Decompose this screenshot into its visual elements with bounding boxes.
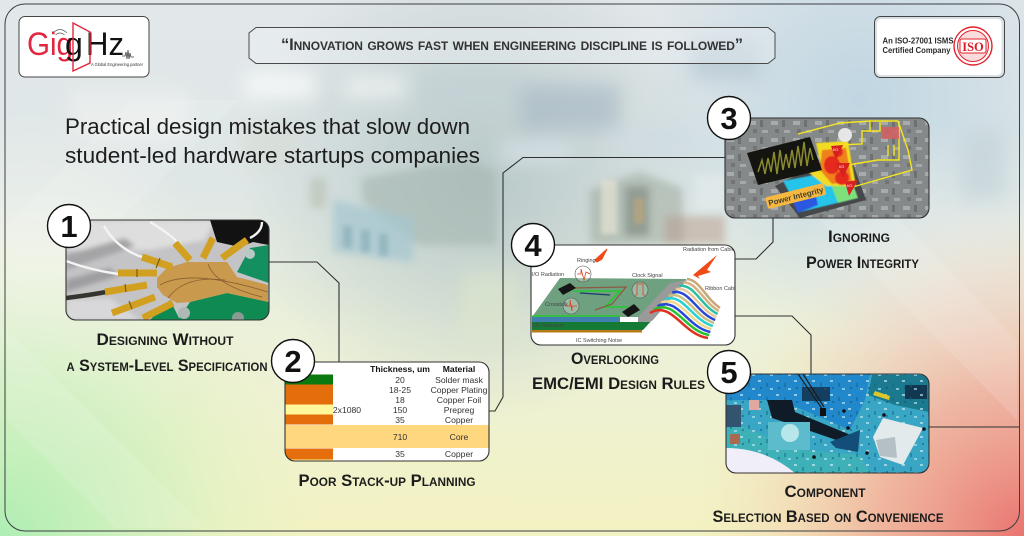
left connector — [726, 405, 741, 427]
white cables — [66, 222, 262, 274]
logo box: GigHz — [19, 16, 149, 77]
logo wordmark — [27, 26, 124, 62]
diagram captions: I/O Radiation — [532, 272, 564, 278]
I/O markers — [831, 145, 858, 196]
label 5 — [712, 482, 944, 526]
label 1: Designing Without — [96, 330, 234, 349]
main heading: Practical design mistakes that slow down — [65, 114, 470, 139]
connector block — [638, 280, 687, 322]
pink pads — [749, 400, 759, 410]
diagram captions: Clock Signal — [632, 273, 663, 279]
I/O markers: I/O — [847, 183, 852, 188]
power integrity tag: Power Integrity — [767, 185, 825, 208]
yellow traces — [798, 121, 912, 187]
quote banner — [249, 28, 775, 64]
logo wordmark: g — [65, 26, 83, 62]
waveform panel — [747, 137, 822, 185]
label 3: Power Integrity — [806, 253, 919, 272]
logo wifi arcs — [53, 30, 67, 35]
table text: 18 — [395, 395, 405, 405]
diagram captions: Crosstalk — [545, 302, 568, 308]
main heading — [65, 114, 480, 168]
table text: 35 — [395, 449, 405, 459]
badge 5: 5 — [720, 355, 738, 390]
label 1: a System-Level Specification — [66, 356, 268, 375]
badge 3 — [708, 96, 750, 140]
gold connectors — [105, 238, 247, 318]
badge 1: 1 — [60, 209, 78, 244]
main heading: student-led hardware startups companies — [65, 143, 480, 168]
table text: 18-25 — [389, 385, 411, 395]
traces — [532, 287, 628, 316]
table text: 35 — [395, 415, 405, 425]
ribbon cable — [650, 279, 720, 338]
table text: Copper Plating — [431, 385, 488, 395]
I/O markers: I/O — [833, 147, 838, 152]
label 3 — [806, 227, 919, 272]
badge 2: 2 — [284, 344, 302, 379]
board — [532, 278, 687, 317]
logo wordmark: Hz — [86, 26, 124, 62]
diagram captions: IC Switching Noise — [576, 338, 622, 344]
table text: Material — [443, 364, 475, 374]
table text: Prepreg — [444, 405, 475, 415]
I/O markers: I/O — [839, 164, 844, 169]
table text: Core — [450, 432, 469, 442]
badge 2 — [272, 340, 314, 382]
badge 3: 3 — [720, 101, 738, 136]
ISO text — [882, 36, 954, 55]
diagram captions — [532, 247, 738, 344]
ISO text: Certified Company — [882, 45, 951, 55]
table text: 150 — [393, 405, 407, 415]
diagram captions: CB Radiation — [532, 323, 564, 329]
label 1 — [66, 330, 268, 375]
table text — [333, 364, 488, 459]
badge 4 — [512, 224, 554, 266]
badge 1 — [48, 204, 90, 248]
logo tagline: A Global Engineering partner — [91, 62, 143, 68]
stack-up layers — [285, 374, 489, 462]
dark heatsink bar — [767, 400, 853, 442]
screw points — [812, 409, 926, 459]
label 5: Selection Based on Convenience — [712, 507, 944, 526]
label 2: Poor Stack-up Planning — [298, 471, 476, 490]
ISO text: An ISO-27001 ISMS — [882, 36, 954, 46]
label 4 — [532, 349, 705, 393]
card 4: EMC/EMI illustration — [531, 245, 738, 345]
label 4: Overlooking — [571, 349, 659, 368]
diagram captions: Ringing — [577, 258, 596, 264]
probe circles — [563, 266, 648, 314]
faded components — [310, 160, 725, 262]
table text: 20 — [395, 375, 405, 385]
ISO seal: ISO — [962, 40, 984, 54]
badge 5 — [708, 350, 750, 394]
card 1: RF connector board photo — [66, 220, 269, 324]
connector lines between cards — [269, 158, 1019, 427]
label 5: Component — [784, 482, 866, 501]
label 4: EMC/EMI Design Rules — [532, 374, 705, 393]
blue chip — [830, 430, 860, 452]
yellow strip — [873, 391, 890, 400]
silver processor — [873, 418, 923, 465]
label 3: Ignoring — [828, 227, 890, 246]
table text: Solder mask — [435, 375, 484, 385]
tweezers — [798, 374, 824, 410]
diagram captions: Radiation from Cable — [683, 247, 735, 253]
table text: Copper — [445, 415, 473, 425]
logo wordmark: Gig — [27, 26, 73, 62]
teal chip with pale pattern — [768, 422, 810, 450]
logo waveform — [122, 50, 134, 59]
radiation bolts — [693, 255, 717, 279]
badge 4: 4 — [524, 228, 542, 263]
ISO certification box — [874, 16, 1004, 78]
table text: Copper Foil — [437, 395, 481, 405]
chip — [775, 158, 866, 218]
card 3: power integrity image — [725, 118, 929, 218]
white glove — [726, 448, 795, 473]
logo door outline — [73, 23, 90, 71]
table text: Thickness, um — [370, 364, 430, 374]
table text: Copper — [445, 449, 473, 459]
diagram captions: Ribbon Cable — [705, 286, 738, 292]
table text: 2x1080 — [333, 405, 361, 415]
heat map — [783, 141, 858, 213]
card 5: blue circuit board photo — [726, 374, 929, 473]
faint diagonal bands — [7, 100, 1017, 528]
card 2: stack-up table — [285, 362, 489, 462]
quote banner: “Innovation grows fast when engineering discipline is followed” — [281, 36, 743, 54]
table text: 710 — [393, 432, 407, 442]
